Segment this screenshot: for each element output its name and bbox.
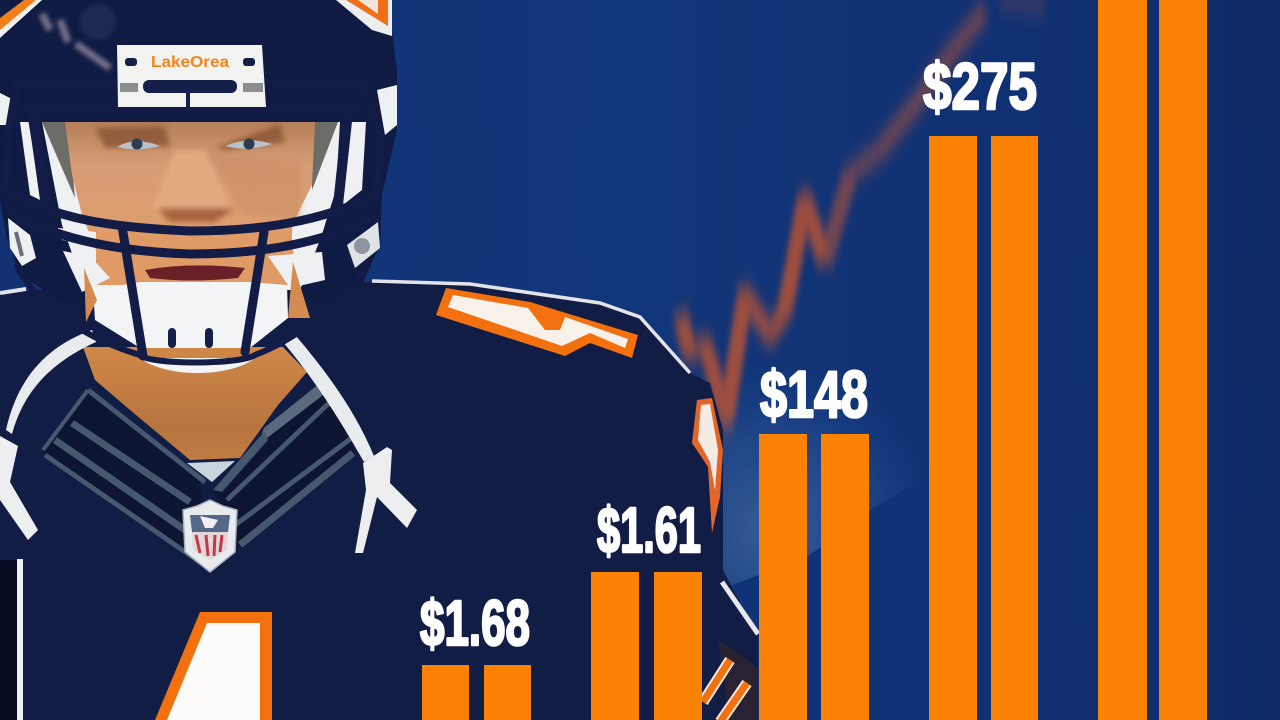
bar group 4 — [923, 49, 1038, 720]
bar group 2 — [591, 494, 702, 720]
sleeve stripes — [703, 660, 747, 720]
face mask — [5, 83, 382, 362]
face window — [42, 122, 340, 290]
shoulder trim — [372, 281, 690, 373]
NFL shield — [183, 500, 237, 572]
collar panels — [43, 383, 355, 570]
sky glow and hill — [560, 340, 960, 720]
mouth — [145, 265, 245, 280]
cheek sides — [84, 268, 97, 322]
jersey body — [0, 282, 758, 720]
bar group 1 — [420, 587, 531, 720]
face shading — [95, 124, 300, 222]
left dark strip — [0, 560, 17, 720]
neck — [83, 347, 307, 460]
eyes — [117, 138, 272, 150]
helmet bumper — [117, 45, 266, 109]
value label: $275 — [923, 49, 1037, 123]
bar group 5 — [1098, 0, 1207, 720]
arm — [719, 640, 758, 720]
jersey number — [155, 612, 272, 720]
nose bridge — [152, 150, 232, 210]
sleeve trim — [722, 582, 758, 634]
value label: $1.68 — [420, 587, 530, 659]
left strap — [6, 330, 96, 434]
left shoulder trim — [0, 289, 26, 293]
nose shadow — [158, 208, 235, 222]
shoulder number — [436, 288, 638, 358]
helmet white side stripes — [0, 85, 397, 205]
value label: $148 — [760, 357, 868, 431]
ear hardware — [8, 218, 380, 268]
lower cheeks white pads — [58, 225, 325, 292]
skin below nose — [96, 232, 292, 285]
right strap — [283, 336, 374, 462]
chin guard — [93, 282, 288, 348]
sleeve patch — [692, 398, 723, 533]
white chest line — [17, 559, 23, 720]
value label: $1.61 — [597, 494, 701, 566]
left strap end — [0, 436, 38, 540]
helmet shell — [0, 0, 397, 300]
bar group 3 — [759, 357, 869, 720]
background trend line — [680, 0, 1045, 420]
face — [65, 122, 315, 285]
hair shadows — [42, 122, 75, 198]
undershirt — [187, 461, 235, 482]
bumper wordmark: LakeOrea — [151, 54, 229, 71]
helmet logos — [0, 0, 392, 38]
player — [0, 0, 758, 720]
helmet scratches — [42, 4, 116, 68]
collar stripes — [43, 390, 353, 567]
right strap tie — [355, 447, 417, 553]
under mask white band — [140, 358, 255, 373]
